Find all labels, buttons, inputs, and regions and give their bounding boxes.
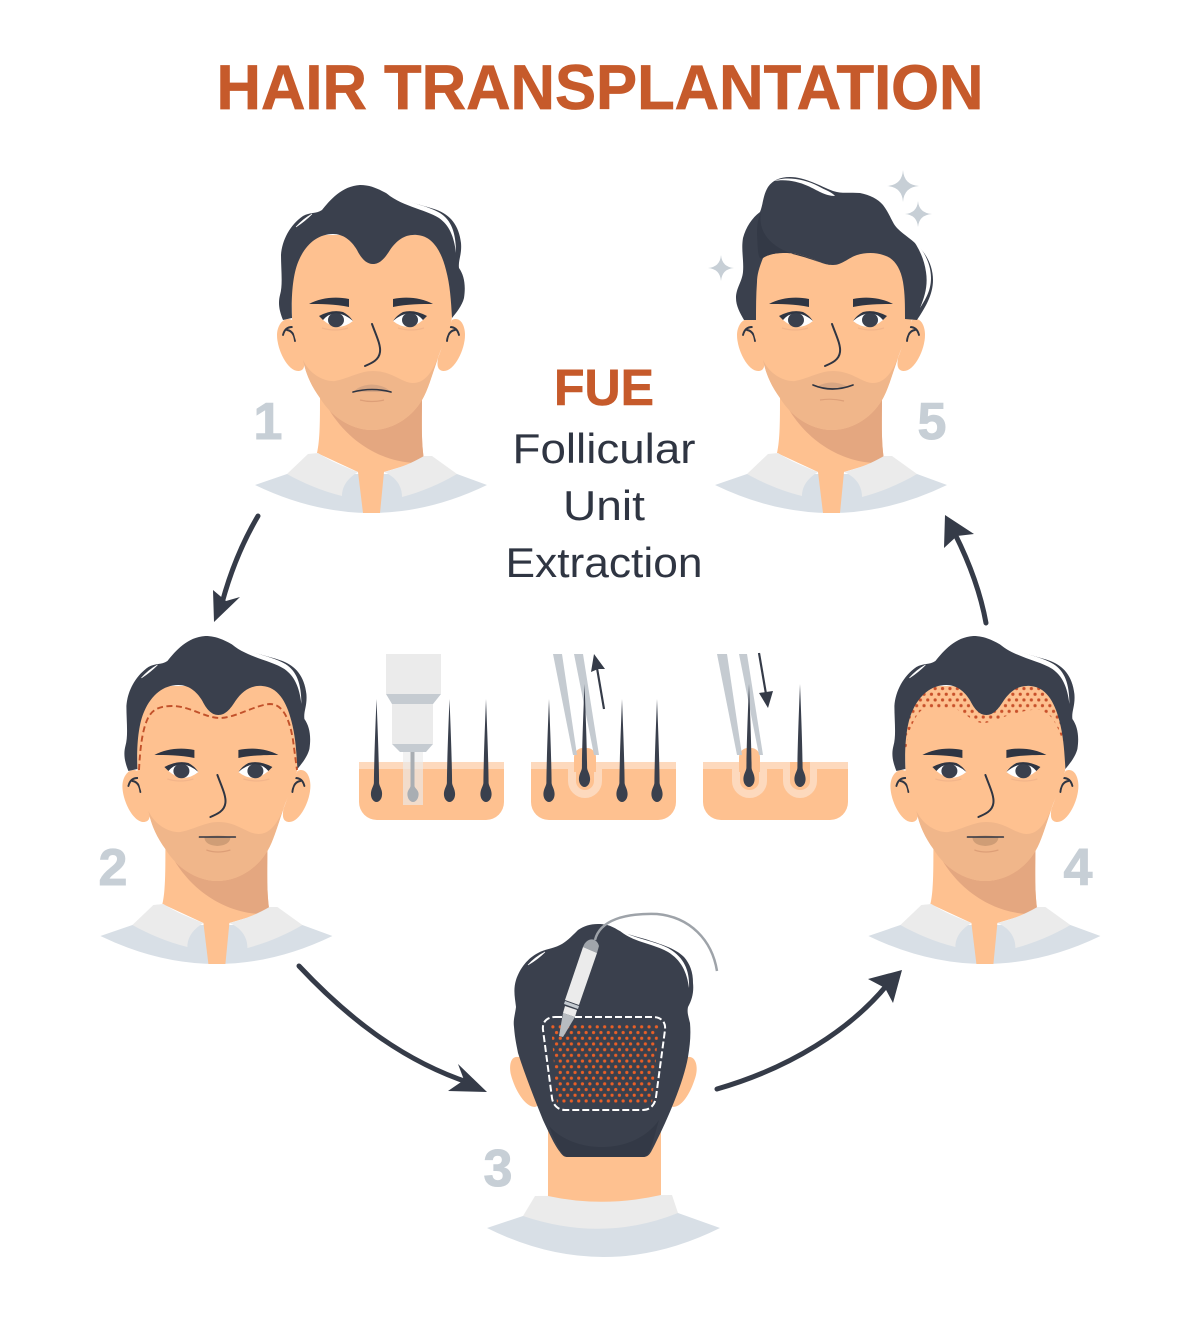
panel: extracting follicle xyxy=(531,654,676,820)
central heading: FUE Follicular Unit Extraction: Extraction xyxy=(506,539,702,586)
implanted dots xyxy=(905,680,1070,752)
step 4: head with implanted hairline xyxy=(868,636,1100,964)
smile xyxy=(813,382,853,389)
panel: punch tool on scalp xyxy=(359,654,504,820)
hair xyxy=(514,924,693,1157)
arrow: step 2 to 3 xyxy=(299,966,487,1092)
step 5: head with restored hair xyxy=(715,177,947,513)
number 4: 4 xyxy=(1064,839,1093,897)
panel: implanting follicle xyxy=(703,653,848,820)
central heading: FUE Follicular Unit Extraction xyxy=(506,359,702,586)
extraction dots xyxy=(551,1024,659,1104)
central heading: FUE Follicular Unit Extraction: FUE xyxy=(554,359,654,416)
number 3: 3 xyxy=(484,1140,512,1198)
step 3: back of head with extraction area xyxy=(487,914,720,1257)
step 1: head with receding hairline xyxy=(255,185,487,513)
title: HAIR TRANSPLANTATION xyxy=(216,53,984,123)
arrow: step 4 to 5 xyxy=(944,515,986,623)
arrow down xyxy=(759,653,773,708)
dashed new hairline xyxy=(139,704,297,770)
number 1: 1 xyxy=(254,393,282,451)
number 2: 2 xyxy=(99,839,127,897)
central heading: FUE Follicular Unit Extraction: Follicular xyxy=(512,425,696,472)
number 5: 5 xyxy=(918,393,946,451)
sparkles xyxy=(708,170,932,281)
step 2: head with dashed hairline xyxy=(100,636,332,964)
dashed extraction outline xyxy=(543,1017,665,1110)
extraction tool with cord xyxy=(559,914,717,1037)
arrow up xyxy=(591,654,605,709)
arrow: step 3 to 4 xyxy=(717,970,902,1089)
arrow: step 1 to 2 xyxy=(213,516,258,622)
full hair xyxy=(736,177,933,320)
central heading: FUE Follicular Unit Extraction: Unit xyxy=(563,482,645,529)
